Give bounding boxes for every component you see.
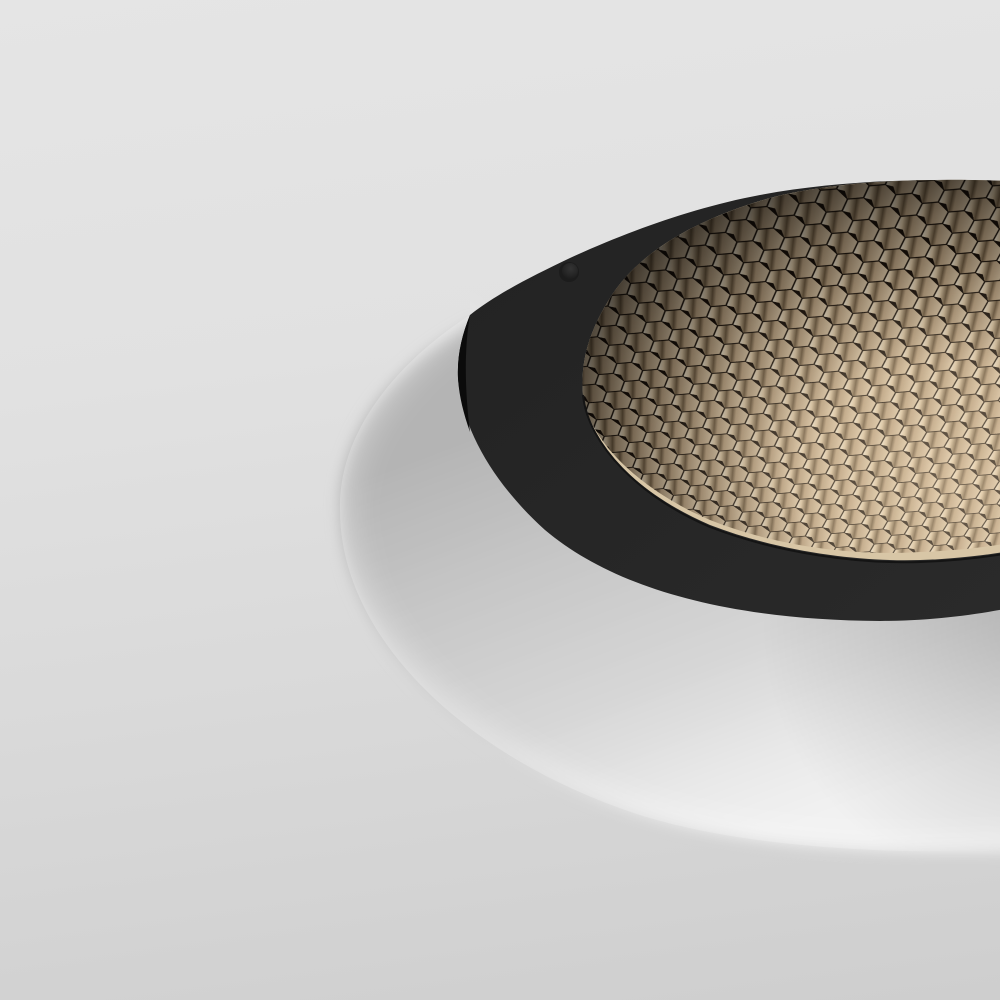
- bezel lip: shadow line beneath honeycomb: [583, 395, 1000, 562]
- lighting: warm glow lowering contrast at centre: [649, 282, 1000, 553]
- honeycomb rim: pale reflector wall: [582, 180, 1000, 560]
- bezel: dark inner left edge: [458, 315, 470, 432]
- icon: mounting screw: [559, 262, 579, 282]
- honeycomb louvre: [582, 180, 1000, 553]
- honeycomb cell lattice in perspective: [582, 180, 1000, 553]
- recess: sloped plaster cavity: [340, 315, 1000, 900]
- bezel: black trim ring: [458, 180, 1000, 621]
- lighting: falloff to the top and left: [582, 180, 1000, 550]
- recess and black bezel: [334, 180, 1000, 856]
